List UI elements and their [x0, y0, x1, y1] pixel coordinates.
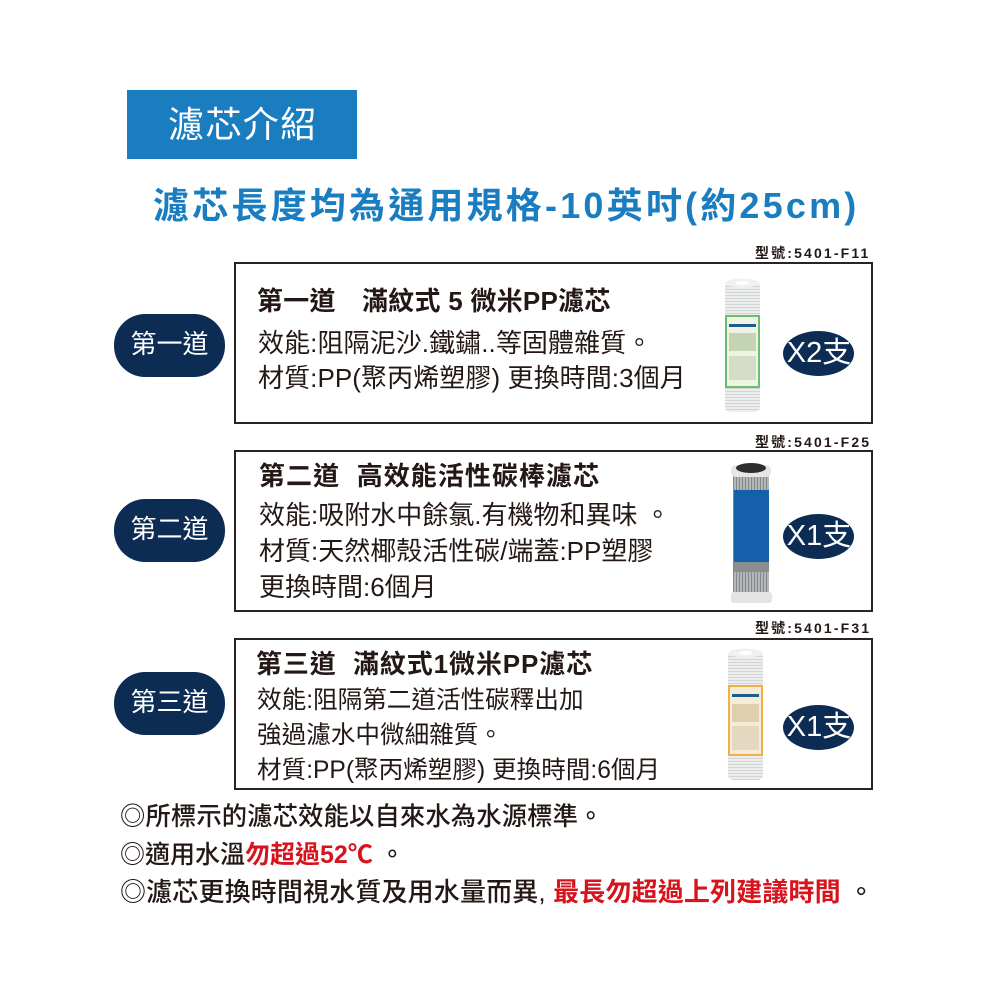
stage label: first: 第一道 — [130, 329, 208, 359]
stage label: third: 第三道 — [130, 687, 208, 717]
description: third filter: 材質:PP(聚丙烯塑膠) 更換時間:6個月 — [257, 757, 660, 784]
model number: F31: 型號:5401-F31 — [755, 620, 871, 636]
description: first filter: 效能:阻隔泥沙.鐵鏽..等固體雜質。 — [258, 328, 652, 358]
panel: third filter — [234, 638, 873, 790]
quantity badge: x1 second — [783, 514, 854, 559]
panel: second filter — [234, 450, 873, 612]
stage label: first — [114, 314, 225, 377]
heading: second filter: 第二道 高效能活性碳棒濾芯 — [259, 461, 600, 491]
quantity badge: x2 — [783, 331, 854, 376]
description: third filter: 強過濾水中微細雜質。 — [257, 722, 503, 749]
note: water temperature: ◎適用水溫勿超過52℃ 。 — [120, 841, 405, 869]
note: replacement time: ◎濾芯更換時間視水質及用水量而異, 最長勿超過上列建議時間 。 — [120, 877, 874, 907]
icon: PP filter with green label — [725, 278, 760, 412]
section tag: filter introduction — [127, 90, 357, 159]
quantity badge: x1 third — [783, 705, 854, 750]
icon: PP filter with orange label — [728, 648, 763, 780]
description: second filter — [259, 500, 671, 602]
stage label: second — [114, 499, 225, 562]
description: second filter: 更換時間:6個月 — [259, 572, 437, 602]
description: first filter: 材質:PP(聚丙烯塑膠) 更換時間:3個月 — [258, 363, 686, 393]
description: first filter — [258, 328, 686, 393]
heading: first filter: 第一道 滿紋式 5 微米PP濾芯 — [257, 286, 611, 316]
model number: F25: 型號:5401-F25 — [755, 434, 871, 450]
heading: third filter: 第三道 滿紋式1微米PP濾芯 — [256, 649, 593, 679]
stage label: third — [114, 672, 225, 735]
panel: first filter — [234, 262, 873, 424]
description: third filter — [257, 687, 660, 784]
section tag: filter introduction: 濾芯介紹 — [168, 104, 318, 145]
model number: F11: 型號:5401-F11 — [755, 245, 870, 261]
quantity badge: x1 second: X1支 — [787, 520, 851, 552]
icon: carbon block filter with blue label — [731, 463, 772, 603]
description: second filter: 材質:天然椰殼活性碳/端蓋:PP塑膠 — [259, 536, 653, 566]
main heading: 濾芯長度均為通用規格-10英吋(約25cm) — [153, 185, 859, 226]
description: second filter: 效能:吸附水中餘氯.有機物和異味 。 — [259, 500, 671, 530]
note: water source: ◎所標示的濾芯效能以自來水為水源標準。 — [120, 803, 604, 831]
stage label: second: 第二道 — [130, 514, 208, 544]
quantity badge: x1 third: X1支 — [787, 711, 851, 743]
description: third filter: 效能:阻隔第二道活性碳釋出加 — [257, 687, 584, 714]
quantity badge: x2: X2支 — [787, 337, 851, 369]
